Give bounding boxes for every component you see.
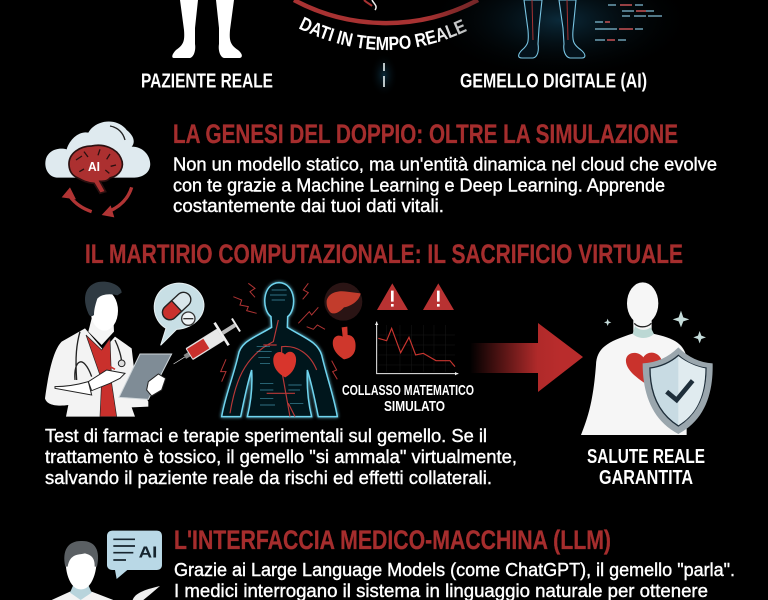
heart in body <box>273 352 296 377</box>
text block: interfaccia: Grazie ai Large Language Models (come ChatGPT), il gemello "parla". <box>174 559 735 580</box>
arrow: from twin to real health <box>470 323 583 392</box>
collapse chart <box>378 325 455 372</box>
label: gemello digitale: GEMELLO DIGITALE (AI) <box>460 70 647 92</box>
coat <box>45 328 148 417</box>
liver <box>324 283 362 321</box>
warning triangles <box>377 283 454 310</box>
text block: genesi: con te grazie a Machine Learning e Deep Learning. Apprende <box>173 174 665 196</box>
sparkles <box>604 311 706 343</box>
text block: martirio: salvando il paziente reale da rischi ed effetti collaterali. <box>45 467 492 488</box>
tablet <box>119 354 172 399</box>
heart organ <box>333 327 356 359</box>
section heading: interfaccia medico-macchina: L'INTERFACCIA MEDICO-MACCHINA (LLM) <box>174 525 611 555</box>
label: paziente reale: PAZIENTE REALE <box>141 70 273 92</box>
label: salute reale garantita <box>587 446 705 489</box>
curved label: dati in tempo reale: DATI IN TEMPO REALE <box>299 16 467 50</box>
shield <box>643 347 713 434</box>
icon: neon body with organs <box>221 283 458 417</box>
text block: genesi: costantemente dai tuoi dati vitali. <box>173 195 444 216</box>
label: salute reale garantita: GARANTITA <box>599 467 693 489</box>
icon: digital twin legs <box>425 0 695 80</box>
icon: real patient legs <box>172 0 242 58</box>
heart <box>626 353 662 383</box>
label: AI: AI <box>88 159 100 174</box>
bubble label AI: AI <box>139 544 157 561</box>
speech bubble with pills <box>154 283 204 345</box>
icon: AI cloud with brain <box>45 121 150 217</box>
syringe <box>166 313 244 375</box>
hand <box>133 586 160 600</box>
text block: interfaccia <box>174 559 735 600</box>
chat bubble <box>107 531 162 579</box>
text block: genesi: Non un modello statico, ma un'entità dinamica nel cloud che evolve <box>173 154 717 174</box>
label: collasso matematico simulato: SIMULATO <box>384 398 445 415</box>
text block: genesi <box>173 154 717 216</box>
text block: martirio <box>45 425 517 488</box>
label: salute reale garantita: SALUTE REALE <box>587 446 705 468</box>
stress squiggles <box>221 283 337 382</box>
icon: physician with AI chat bubble <box>52 531 162 600</box>
icon: protected patient with shield <box>581 282 713 435</box>
text block: martirio: trattamento è tossico, il gemello "si ammala" virtualmente, <box>45 446 517 467</box>
icon: central data ring <box>294 0 478 23</box>
label: collasso matematico simulato: COLLASSO MATEMATICO <box>342 382 474 399</box>
text block: martirio: Test di farmaci e terapie sperimentali sul gemello. Se il <box>45 425 487 446</box>
connector: dashed centre line <box>370 53 398 97</box>
label: collasso matematico simulato <box>342 382 474 415</box>
icon: doctor with tablet <box>45 282 244 417</box>
